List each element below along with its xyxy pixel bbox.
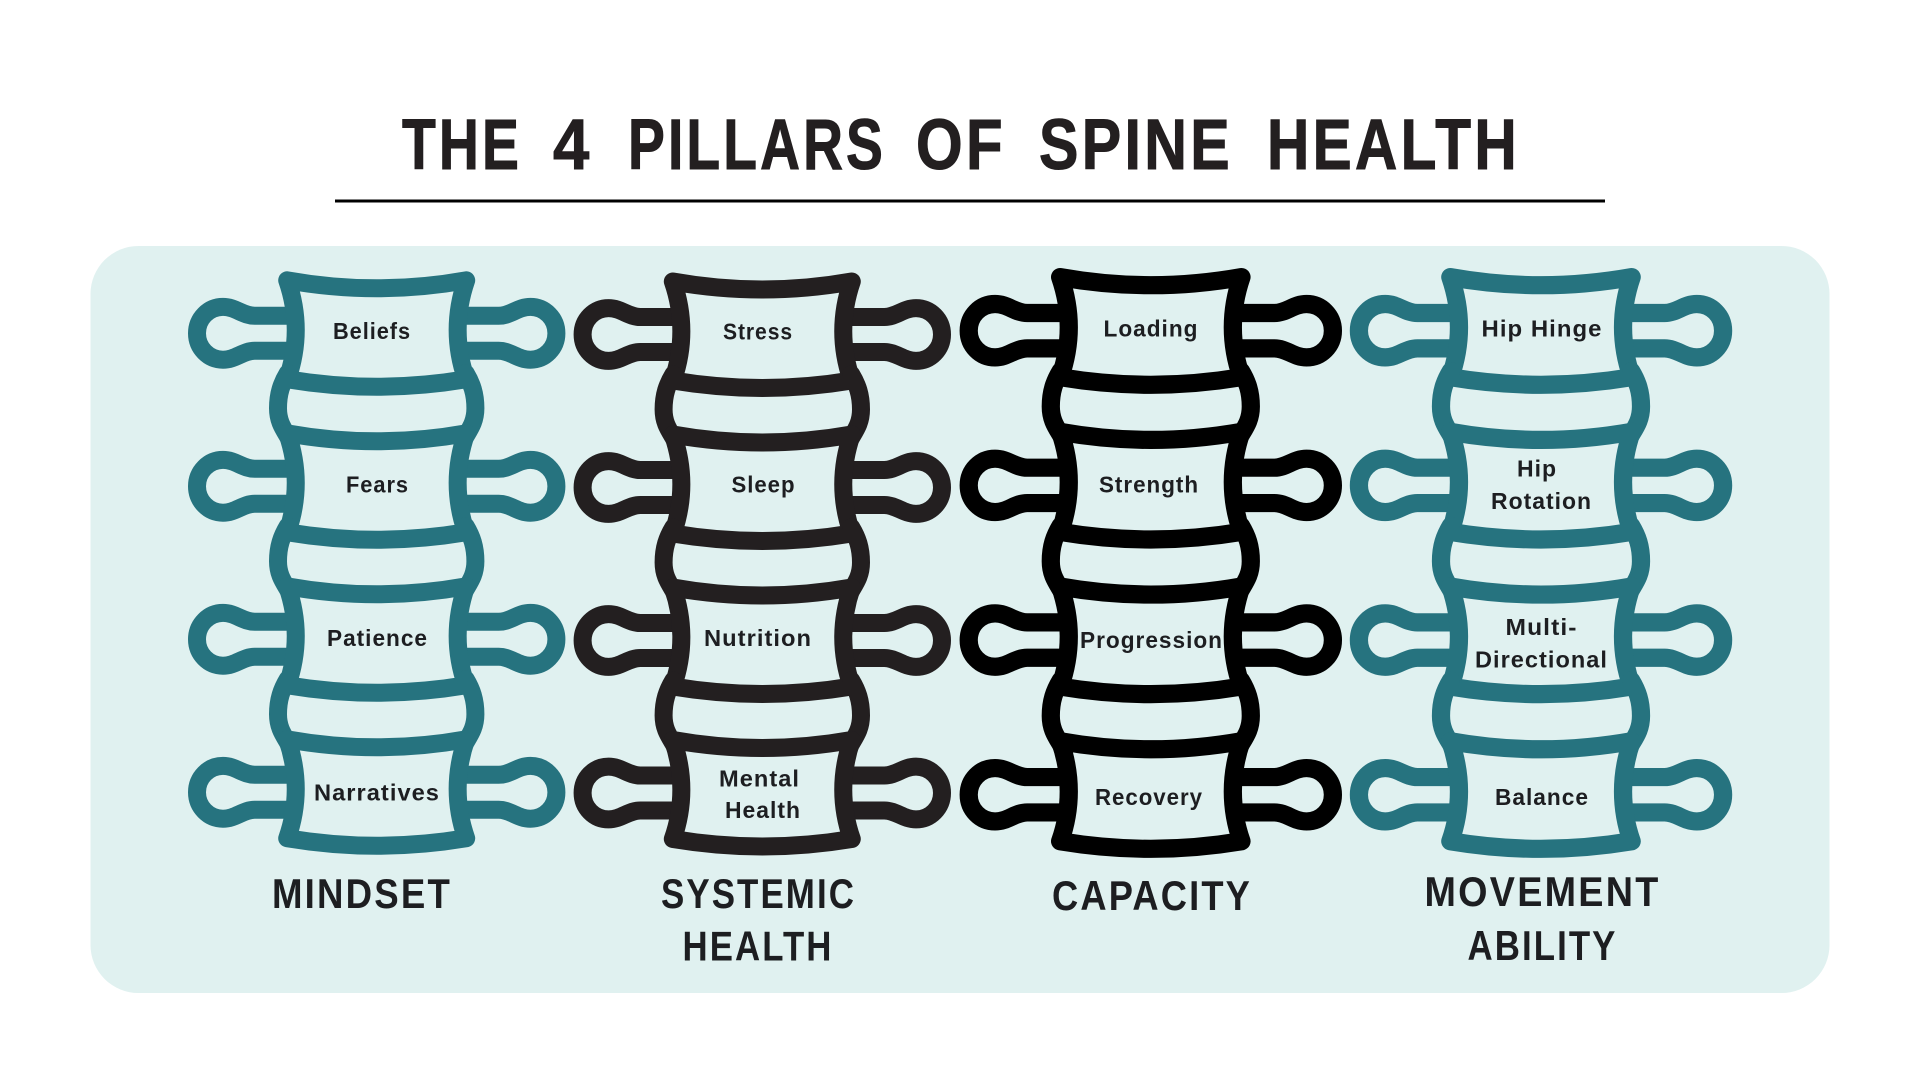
pillar: systemic health <box>583 282 942 970</box>
heading: mindset: MINDSET <box>272 870 452 917</box>
label: sleep: Sleep <box>732 472 796 498</box>
heading: movement ability: ABILITY <box>1468 922 1618 969</box>
title: 4 <box>553 106 593 185</box>
label: strength: Strength <box>1099 472 1199 498</box>
label: beliefs: Beliefs <box>333 318 411 344</box>
label: recovery: Recovery <box>1095 784 1203 810</box>
label: progression: Progression <box>1080 627 1223 653</box>
icon: teal spine <box>1359 277 1723 849</box>
label: hip hinge: Hip Hinge <box>1482 315 1602 341</box>
pillar: capacity <box>969 277 1333 919</box>
title <box>402 106 1520 185</box>
label: stress: Stress <box>723 318 793 344</box>
pillar: mindset <box>197 280 556 917</box>
icon: dark spine <box>583 282 942 846</box>
label: balance: Balance <box>1495 784 1589 810</box>
heading: systemic health: HEALTH <box>682 923 834 970</box>
label: multi-directional <box>1475 614 1608 672</box>
label: mental health: Mental <box>719 766 800 792</box>
title: SPINE <box>1039 106 1233 185</box>
pillar: movement ability <box>1359 277 1723 969</box>
title: THE <box>402 106 522 185</box>
label: hip rotation: Hip <box>1517 455 1557 481</box>
label: hip rotation <box>1491 455 1592 514</box>
title: HEALTH <box>1267 106 1520 185</box>
icon: teal spine <box>197 280 556 846</box>
heading: movement ability: MOVEMENT <box>1424 868 1660 915</box>
label: loading: Loading <box>1104 315 1198 341</box>
heading: systemic health: SYSTEMIC <box>661 870 856 917</box>
label: nutrition: Nutrition <box>704 625 812 651</box>
heading: movement ability <box>1424 868 1660 969</box>
label: mental health: Health <box>725 797 801 823</box>
label: multi-directional: Multi- <box>1506 614 1578 640</box>
heading: capacity: CAPACITY <box>1052 872 1252 919</box>
label: mental health <box>719 766 801 823</box>
label: multi-directional: Directional <box>1475 646 1608 672</box>
label: fears: Fears <box>346 472 409 498</box>
label: narratives: Narratives <box>314 780 440 806</box>
icon: black spine <box>969 277 1333 849</box>
label: hip rotation: Rotation <box>1491 488 1592 514</box>
heading: systemic health <box>661 870 856 970</box>
label: patience: Patience <box>327 625 428 651</box>
title underline <box>335 200 1605 202</box>
title: PILLARS <box>628 106 886 185</box>
title: OF <box>916 106 1006 185</box>
panel: background <box>90 246 1830 993</box>
